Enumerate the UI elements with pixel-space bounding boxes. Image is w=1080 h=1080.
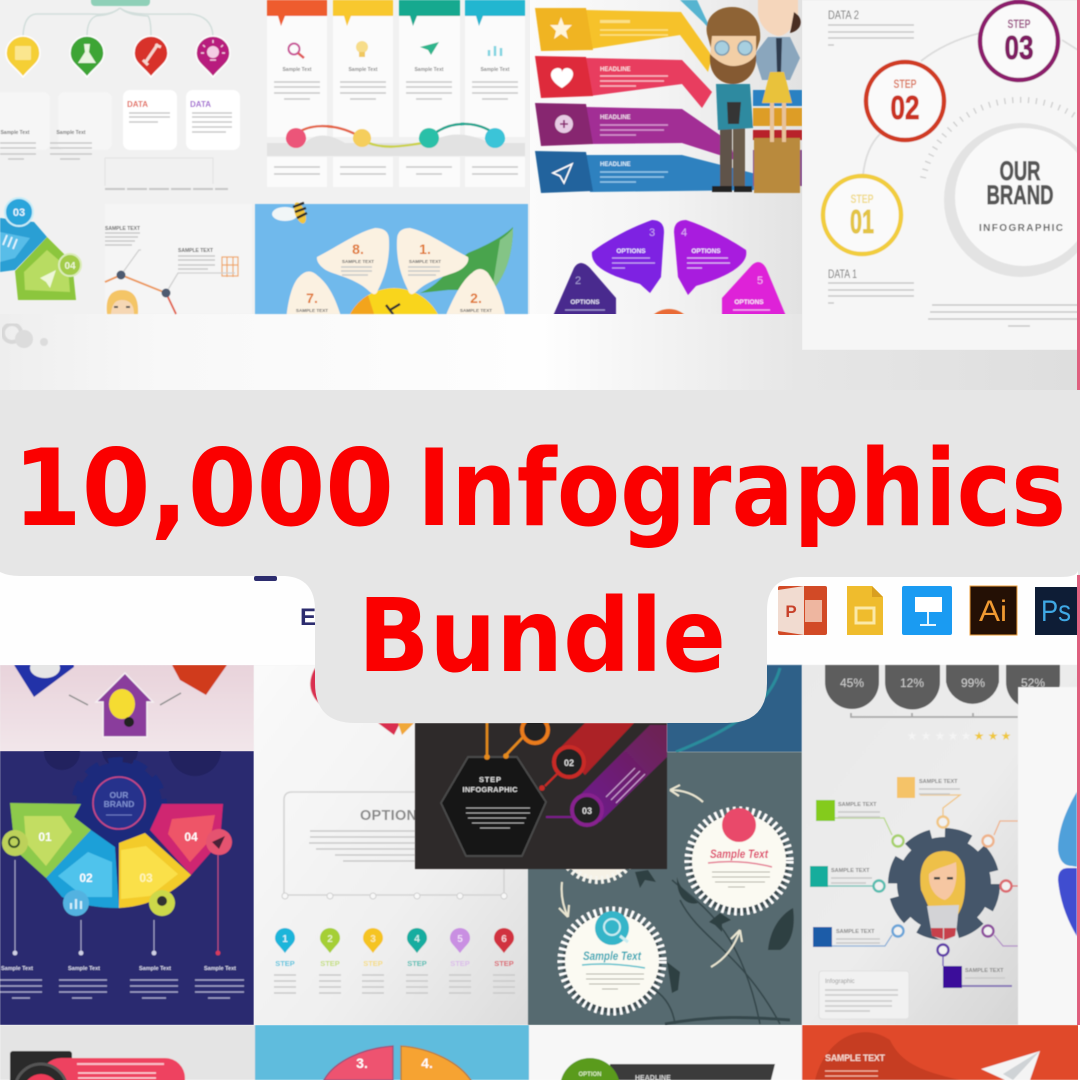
leader lines xyxy=(15,860,154,953)
orange line with nodes xyxy=(105,270,176,314)
panel: house idea graphic xyxy=(0,658,254,752)
step 02 xyxy=(866,62,944,140)
body lines xyxy=(0,980,244,998)
badges xyxy=(2,829,232,916)
icon: magenta pin xyxy=(196,36,230,77)
pale cards under pins xyxy=(0,130,86,135)
arrow: curved right xyxy=(711,930,742,967)
card: purple data xyxy=(186,90,240,150)
step 02: 02 xyxy=(890,89,920,126)
title: 10,000 Infographics xyxy=(13,427,1066,550)
pin 3: STEP xyxy=(363,959,383,968)
segment: 02 blue xyxy=(46,830,119,908)
pin 1 xyxy=(275,928,295,968)
panel: ribbon headlines with characters xyxy=(535,0,802,193)
petal 3: OPTIONS xyxy=(616,248,646,255)
badge: red sample text xyxy=(689,808,789,913)
pin 1: STEP xyxy=(275,959,295,968)
star rating: ★ xyxy=(988,729,998,743)
step body lines xyxy=(274,975,515,993)
ribbon: red: HEADLINE xyxy=(600,67,631,73)
icon: Photoshop: Ps xyxy=(1041,595,1071,628)
panel: map pin infographic xyxy=(0,0,240,300)
title band xyxy=(0,390,1080,630)
pin 6: STEP xyxy=(494,959,514,968)
percentage tabs: 12% xyxy=(900,676,924,690)
step 01: STEP xyxy=(850,192,874,206)
panel: option headline xyxy=(529,1025,802,1080)
connector path xyxy=(121,250,235,293)
icon: red pin xyxy=(134,36,168,77)
red ribbon xyxy=(539,723,634,791)
column labels: Sample Text xyxy=(348,67,378,73)
ribbon: blue xyxy=(535,151,760,193)
petal 8: SAMPLE TEXT xyxy=(342,259,374,264)
segment: 01 green xyxy=(10,803,91,878)
column headers xyxy=(267,0,525,26)
panel: pale overlay with petals xyxy=(1018,687,1078,1025)
badge: teal sample text: Sample Text xyxy=(583,951,642,963)
fragment: brand title letters: E xyxy=(300,604,316,631)
panel: flower infographic xyxy=(254,201,529,315)
icon: blue clock arrow xyxy=(14,658,74,697)
notes box xyxy=(819,971,909,1019)
petal 4: OPTIONS xyxy=(691,248,721,255)
hexagon: STEP xyxy=(479,775,501,784)
connector rings xyxy=(874,816,1012,956)
brand disc xyxy=(944,123,1080,277)
orange connector xyxy=(484,717,548,760)
sample text blocks: SAMPLE TEXT xyxy=(105,226,140,232)
percentage tabs: 52% xyxy=(1021,676,1045,690)
illustration: man xyxy=(707,7,760,192)
icon: yellow pin xyxy=(6,36,40,77)
panel: blue petals: 4. xyxy=(421,1055,433,1071)
column labels xyxy=(282,67,510,73)
petal 7: 7. xyxy=(306,290,318,306)
panel: orange line with avatar xyxy=(104,226,240,315)
column labels: Sample Text xyxy=(480,67,510,73)
panel: our brand steps xyxy=(802,0,1080,350)
panel: lower collage base xyxy=(0,665,1078,1025)
fragment: brand title letters xyxy=(254,576,316,631)
sample text labels: SAMPLE TEXT xyxy=(919,779,958,785)
icon: Illustrator: Ai xyxy=(979,595,1007,628)
step 03 xyxy=(980,2,1058,80)
hexagon: INFOGRAPHIC xyxy=(462,785,518,794)
white strip right with app icons xyxy=(767,570,1078,665)
pin 2: STEP xyxy=(320,959,340,968)
star rating: ★ xyxy=(961,729,971,743)
data 2 text: DATA 2 xyxy=(828,8,859,22)
sample text labels: SAMPLE TEXT xyxy=(838,802,877,808)
panel: red card xyxy=(0,1025,255,1080)
illustration: woman xyxy=(754,0,801,142)
step 03: STEP xyxy=(1008,17,1030,31)
data 1 text xyxy=(828,267,914,303)
small sample text labels xyxy=(0,130,92,159)
pin 6 xyxy=(494,928,514,968)
petal 2: OPTIONS xyxy=(570,299,600,306)
bundle pill xyxy=(315,570,767,723)
small sample text labels: Sample Text xyxy=(0,130,30,136)
petal 7 xyxy=(286,271,342,320)
pin 2: 2 xyxy=(327,934,333,945)
panel: gear avatar xyxy=(802,665,1078,1025)
panel: blue petals xyxy=(255,1025,529,1080)
connector lines from top label xyxy=(23,8,213,36)
icon: Photoshop xyxy=(1035,587,1078,635)
segment: 03 yellow xyxy=(119,833,191,908)
petal 7: SAMPLE TEXT xyxy=(296,308,328,313)
sample text labels: SAMPLE TEXT xyxy=(831,868,870,874)
cloud shadow band xyxy=(267,134,525,156)
icon: red arrow xyxy=(172,665,227,695)
petal 8: 8. xyxy=(352,241,364,257)
background: top collage area xyxy=(0,0,1080,390)
illustration: box xyxy=(754,138,800,193)
connector nodes xyxy=(282,893,507,899)
star rating: ★ xyxy=(921,729,931,743)
percentage tabs: 45% xyxy=(840,676,864,690)
column cards xyxy=(267,0,525,187)
sample text labels: Sample Text xyxy=(68,966,100,972)
bottom note box xyxy=(105,158,213,186)
ribbon: purple xyxy=(535,103,735,160)
icon: orange calendar xyxy=(222,257,238,277)
illustration: background stripes xyxy=(753,90,802,186)
star rating: ★ xyxy=(1001,729,1011,743)
icon: PowerPoint: P xyxy=(785,602,797,621)
panel: option headline: OPTION xyxy=(578,1072,602,1078)
star rating xyxy=(907,729,1011,743)
segment: 04 pink xyxy=(150,804,223,875)
icon: faint gears xyxy=(3,324,48,348)
hexagon xyxy=(441,757,546,856)
options body text xyxy=(309,831,415,861)
red ribbon: 02 xyxy=(564,758,574,768)
icon: avatar xyxy=(107,290,138,314)
petal 4 xyxy=(674,220,746,295)
panel: timeline columns xyxy=(267,0,525,187)
pink right edge xyxy=(1077,0,1080,1025)
badge 04: 04 xyxy=(64,261,76,272)
tick ring xyxy=(923,100,1078,178)
percentage tabs xyxy=(825,665,1060,710)
arrow: curved left xyxy=(559,882,569,917)
pin 4: STEP xyxy=(407,959,427,968)
pin 4 xyxy=(407,928,427,968)
badge: red sample text: Sample Text xyxy=(710,849,769,861)
arcs connecting steps xyxy=(863,33,1078,175)
card: red data: DATA xyxy=(127,100,148,109)
icon: purple house with bulb xyxy=(96,673,153,737)
badge 03 xyxy=(5,198,33,226)
icon: Google Slides xyxy=(847,586,883,635)
sample text labels: Sample Text xyxy=(204,966,236,972)
column icons xyxy=(288,41,501,58)
title: Bundle: Bundle xyxy=(358,577,726,696)
arrow: curved top xyxy=(670,785,703,802)
avatar xyxy=(920,851,965,940)
petal 5: OPTIONS xyxy=(734,299,764,306)
icon squares xyxy=(810,777,962,988)
central gear: BRAND xyxy=(104,799,134,809)
column labels: Sample Text xyxy=(282,67,312,73)
star rating: ★ xyxy=(935,729,945,743)
sample text blocks: SAMPLE TEXT xyxy=(178,248,213,254)
ribbon: purple: HEADLINE xyxy=(600,115,631,121)
column labels: Sample Text xyxy=(414,67,444,73)
petal 1: SAMPLE TEXT xyxy=(409,259,441,264)
purple ribbon: 03 xyxy=(582,806,592,816)
panel: paper plane: SAMPLE TEXT xyxy=(825,1053,886,1063)
sample text labels: SAMPLE TEXT xyxy=(965,968,1004,974)
sample text labels xyxy=(1,966,236,972)
sample text blocks xyxy=(105,226,215,269)
central gear xyxy=(76,762,162,848)
panel: blue petals: 3. xyxy=(356,1055,368,1071)
gear xyxy=(897,837,991,931)
icon: green pin xyxy=(70,36,104,77)
segment: 03 yellow: 03 xyxy=(139,871,153,885)
petal 2: 2 xyxy=(575,275,581,287)
footer text lines xyxy=(928,305,1078,326)
petal 1 xyxy=(397,228,468,294)
badge: teal sample text xyxy=(562,911,662,1013)
central gear: OUR xyxy=(110,790,128,800)
partial diagram fragments xyxy=(310,668,325,708)
options frame xyxy=(284,792,504,895)
wave connector xyxy=(296,124,495,147)
pin 5: 5 xyxy=(457,934,463,945)
segment: 04 pink: 04 xyxy=(184,830,198,844)
partial badge behind dark panel xyxy=(560,804,636,880)
step 02: STEP xyxy=(894,77,916,91)
petal 2: 2. xyxy=(470,290,482,306)
brand disc: INFOGRAPHIC xyxy=(979,223,1063,234)
segment: 02 blue: 02 xyxy=(79,871,93,885)
petal indigo xyxy=(1058,868,1078,938)
step 03: 03 xyxy=(1004,29,1034,66)
segment: 01 green: 01 xyxy=(38,830,52,844)
decorative background gears xyxy=(44,724,221,776)
pin 4: 4 xyxy=(414,934,420,945)
badge 04 xyxy=(59,254,81,276)
pin 3 xyxy=(363,928,383,968)
panel: purple option petals xyxy=(553,219,786,314)
icon: Keynote xyxy=(902,586,952,635)
arrow segments infographic xyxy=(0,218,76,300)
petal 2 xyxy=(446,268,506,315)
bee xyxy=(272,201,308,225)
petal 1: 1. xyxy=(419,241,431,257)
timeline nodes xyxy=(286,128,505,148)
ribbon: blue: HEADLINE xyxy=(600,162,631,168)
pin 5 xyxy=(450,928,470,968)
decorative plant xyxy=(600,880,790,1024)
panel: options with step pins xyxy=(254,665,528,1025)
panel: slate sample text badges xyxy=(528,752,802,1025)
bottom row xyxy=(0,1025,1080,1080)
sample text labels: Sample Text xyxy=(139,966,171,972)
panel: paper plane xyxy=(802,1025,1080,1080)
ribbon: red xyxy=(535,56,712,108)
sample text lines xyxy=(831,789,1005,978)
panel: dark step infographic xyxy=(415,717,667,869)
orange ball xyxy=(653,308,685,314)
percentage tabs: 99% xyxy=(961,676,985,690)
pin glyphs xyxy=(15,40,225,65)
petal blue xyxy=(1058,790,1078,867)
panel: navy brand gear xyxy=(0,724,254,1025)
petal 2: SAMPLE TEXT xyxy=(460,308,492,313)
ribbon: cyan top fragment xyxy=(680,0,712,32)
pin 2 xyxy=(320,928,340,968)
connector lines xyxy=(69,693,181,705)
star rating: ★ xyxy=(974,729,984,743)
sample text labels xyxy=(831,779,1004,974)
card: red data xyxy=(123,90,177,150)
pin 6: 6 xyxy=(501,934,507,945)
panel: blue corner xyxy=(667,665,802,752)
data 1 text: DATA 1 xyxy=(828,267,857,281)
connectors xyxy=(828,795,1018,986)
purple ribbon xyxy=(546,725,667,825)
badge 03: 03 xyxy=(13,207,25,219)
petal 4: 4 xyxy=(681,227,687,239)
ribbon: yellow xyxy=(535,8,712,72)
data 2 text xyxy=(828,8,914,45)
star rating: ★ xyxy=(907,729,917,743)
title: 10,000 Infographics: 10,000 xyxy=(13,427,394,550)
step 01 xyxy=(823,176,901,254)
petal 5 xyxy=(722,262,786,316)
white strip left xyxy=(0,572,316,665)
pin 1: 1 xyxy=(282,934,288,945)
flower centre xyxy=(350,287,438,315)
star rating: ★ xyxy=(948,729,958,743)
petal 3: 3 xyxy=(649,227,655,239)
petal 5: 5 xyxy=(757,275,763,287)
options heading: OPTION xyxy=(360,808,417,824)
column body lines xyxy=(274,82,518,174)
petal 3 xyxy=(592,220,664,293)
petal 8 xyxy=(317,228,389,294)
sample text labels: SAMPLE TEXT xyxy=(836,929,875,935)
notes box: Infographic xyxy=(825,979,855,985)
step 01: 01 xyxy=(850,203,874,240)
leaf xyxy=(420,227,513,293)
icon: Illustrator xyxy=(970,586,1017,635)
icon: PowerPoint xyxy=(778,586,827,635)
pin 5: STEP xyxy=(450,959,470,968)
petal 2 xyxy=(553,263,616,316)
top teal label xyxy=(91,0,150,6)
card: purple data: DATA xyxy=(190,100,211,109)
brand disc: OUR xyxy=(1000,156,1040,186)
pin 3: 3 xyxy=(370,934,376,945)
small sample text labels: Sample Text xyxy=(56,130,86,136)
sample text labels: Sample Text xyxy=(1,966,33,972)
